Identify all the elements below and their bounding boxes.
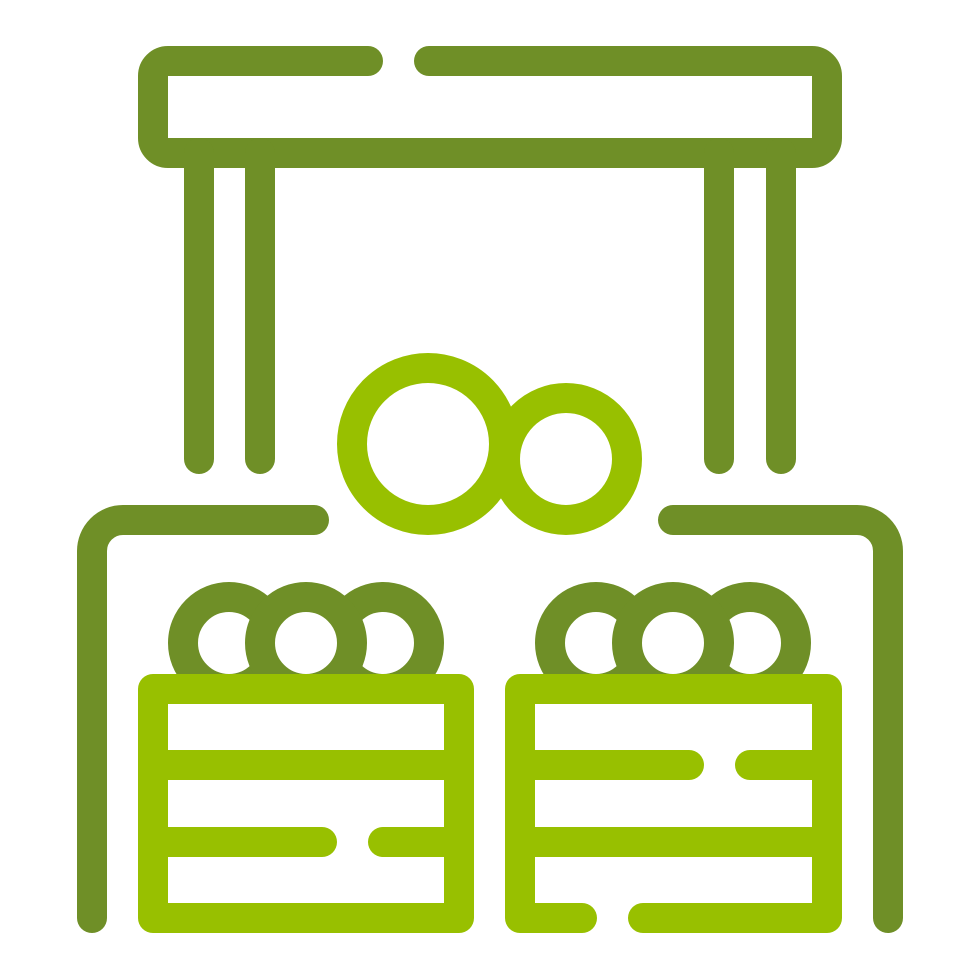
right crate produce (550, 597, 796, 689)
right crate (520, 689, 827, 918)
stall awning (153, 61, 827, 153)
counter outline (92, 520, 888, 918)
stall posts (199, 153, 781, 459)
icon: market stall (77, 46, 903, 933)
hanging round fruits (352, 368, 627, 520)
left crate (153, 689, 459, 918)
left crate produce (183, 597, 429, 689)
